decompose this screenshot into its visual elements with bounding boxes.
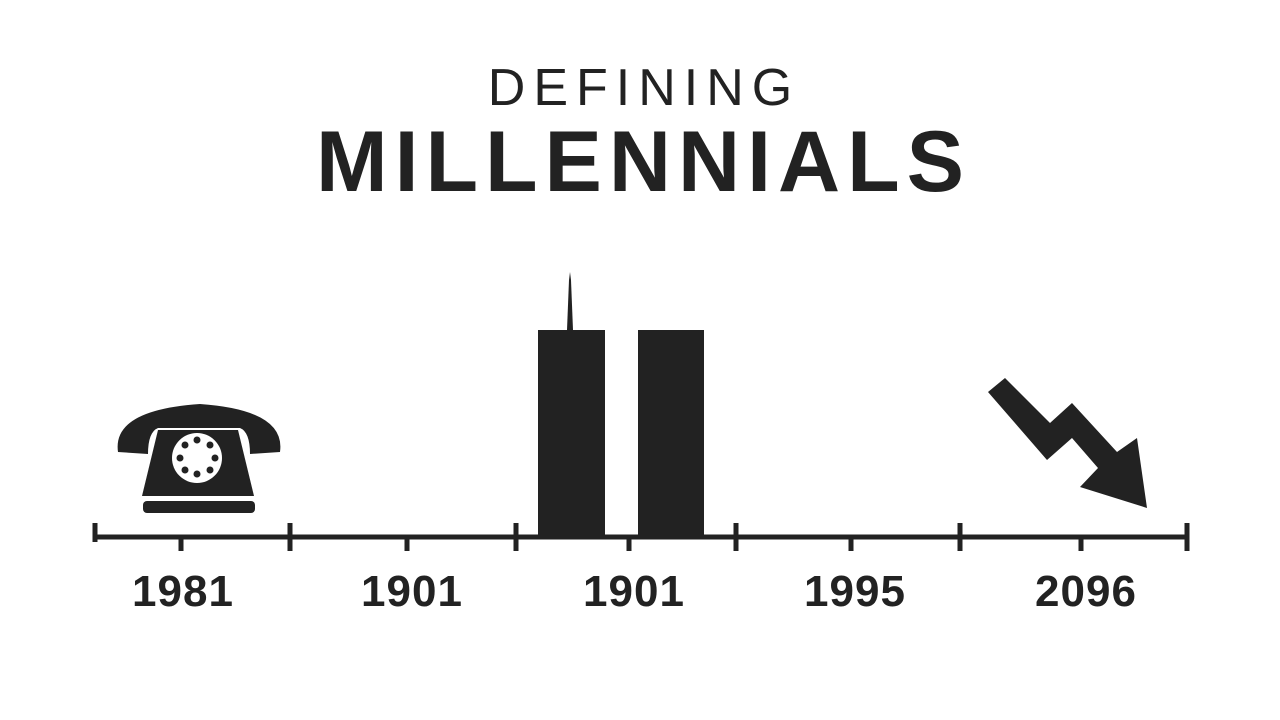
year labels: 1981 [132,567,234,616]
year labels [132,567,1137,616]
icon: twin towers [538,272,704,538]
title: MILLENNIALS: MILLENNIALS [316,114,971,210]
year labels: 1995 [804,567,906,616]
icon: rotary phone [118,404,280,513]
icon: down arrow [988,378,1147,508]
axis [93,523,1187,551]
year labels: 1901 [583,567,685,616]
year labels: 1901 [361,567,463,616]
year labels: 2096 [1035,567,1137,616]
title: DEFINING: DEFINING [488,59,800,117]
